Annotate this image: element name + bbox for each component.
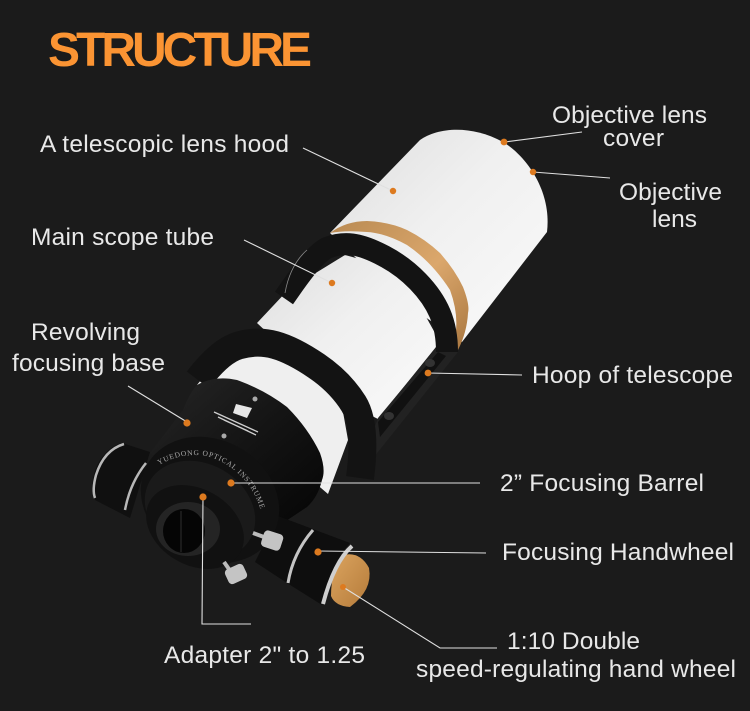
label: main tube: Main scope tube	[31, 224, 214, 251]
telescope illustration	[92, 130, 548, 607]
right handwheel	[255, 516, 350, 605]
label: objective lens cover: cover	[603, 125, 664, 152]
label: double speed hand wheel: 1:10 Double	[507, 628, 640, 655]
thumb screw 2	[224, 562, 248, 585]
white tube lower band	[197, 345, 348, 494]
gold knob	[331, 554, 370, 607]
label: objective lens: lens	[652, 206, 697, 233]
lens hood	[330, 130, 548, 342]
label: objective lens cover	[552, 102, 707, 152]
focuser cylinder	[150, 378, 324, 525]
left handwheel	[92, 443, 150, 518]
label: objective lens cover: Objective lens	[552, 102, 707, 129]
label: objective lens: Objective	[619, 179, 722, 206]
lower hoop	[198, 343, 362, 478]
flange	[131, 468, 259, 586]
label: hoop: Hoop of telescope	[532, 362, 733, 389]
label: double speed hand wheel	[416, 628, 736, 683]
focuser ring	[118, 412, 302, 588]
gold ring	[330, 221, 468, 350]
label: focusing base	[12, 319, 165, 377]
ring text	[159, 455, 261, 512]
upper hoop	[284, 244, 447, 352]
logo plate	[214, 396, 258, 438]
hoop outline arc	[285, 250, 307, 293]
label: double speed hand wheel: speed-regulating hand wheel	[416, 656, 736, 683]
telescope illustration: YUEDONG OPTICAL INSTRUMENTS CO.,LTD	[156, 450, 265, 508]
knob silver rim	[323, 546, 352, 604]
eyepiece hole	[163, 509, 205, 553]
label: objective lens	[619, 179, 722, 233]
label: adapter: Adapter 2" to 1.25	[164, 642, 365, 669]
label: focusing base: focusing base	[12, 350, 165, 377]
main scope tube	[257, 255, 440, 419]
label: handwheel: Focusing Handwheel	[502, 539, 734, 566]
title: STRUCTURE	[48, 24, 312, 77]
leader lines	[128, 132, 610, 648]
label: focusing base: Revolving	[31, 319, 140, 346]
label: lens hood: A telescopic lens hood	[40, 131, 289, 158]
marker dots	[183, 139, 536, 590]
drawtube	[127, 441, 273, 579]
label: focusing barrel: 2” Focusing Barrel	[500, 470, 704, 497]
thumb screw 1	[253, 529, 284, 552]
hoop bracket bar	[358, 347, 458, 472]
